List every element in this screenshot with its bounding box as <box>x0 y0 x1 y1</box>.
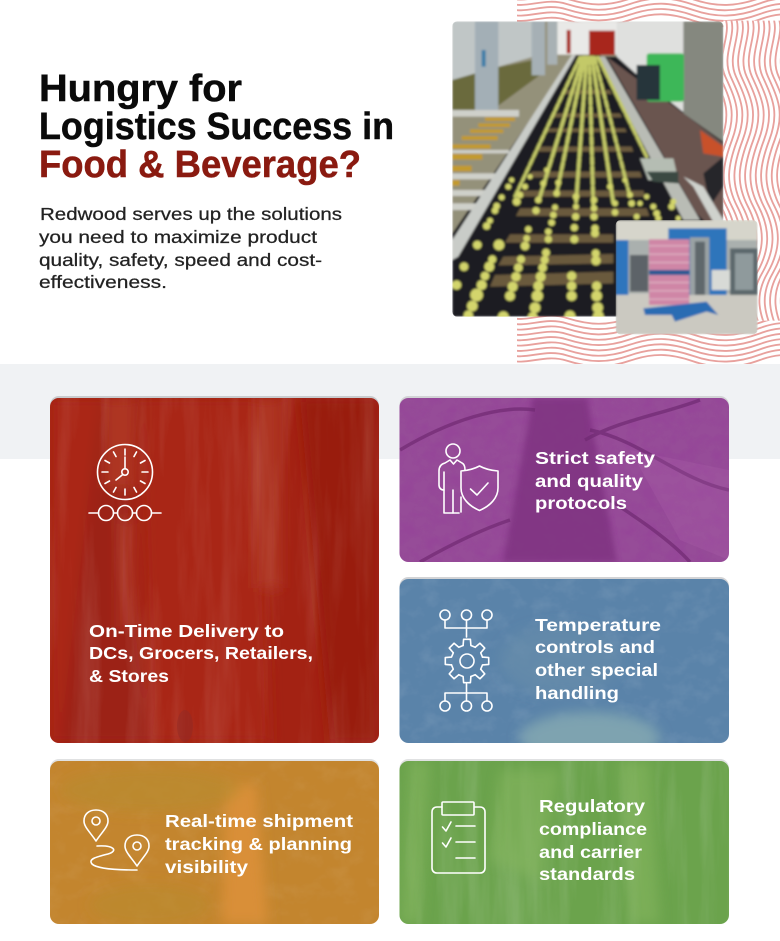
intro paragraph <box>39 204 342 292</box>
label: safety and quality <box>535 448 655 513</box>
decorative wave pattern <box>507 0 780 367</box>
label: temperature controls: handling <box>535 683 619 703</box>
label: on-time delivery: & Stores <box>89 666 169 686</box>
icon: gear network <box>440 610 492 711</box>
label: safety and quality: and quality <box>535 471 643 491</box>
label: real-time tracking: Real-time shipment <box>165 811 353 831</box>
label: temperature controls: Temperature <box>535 615 661 635</box>
icon: clock with route nodes <box>89 444 161 520</box>
title: Hungry for <box>39 68 242 110</box>
label: safety and quality: Strict safety <box>535 448 655 468</box>
label: on-time delivery: DCs, Grocers, Retailers, <box>89 643 313 663</box>
photo: fruit conveyor line <box>452 21 723 322</box>
panel: on-time delivery <box>50 396 379 743</box>
label: regulatory compliance: and carrier <box>539 842 642 862</box>
label: real-time tracking <box>165 811 353 877</box>
label: regulatory compliance: Regulatory <box>539 796 645 816</box>
label: on-time delivery <box>89 621 313 686</box>
label: regulatory compliance: compliance <box>539 819 647 839</box>
label: real-time tracking: visibility <box>165 857 248 877</box>
grey background band <box>0 364 780 459</box>
panel: real-time tracking <box>50 759 379 925</box>
label: temperature controls: other special <box>535 660 658 680</box>
intro paragraph: effectiveness. <box>39 272 167 292</box>
panel: regulatory compliance <box>400 759 729 924</box>
icon: map pins with route <box>84 810 149 870</box>
intro paragraph: quality, safety, speed and cost- <box>39 250 322 270</box>
label: on-time delivery: On-Time Delivery to <box>89 621 284 641</box>
label: regulatory compliance <box>539 796 647 884</box>
panel: temperature controls <box>400 577 729 743</box>
intro paragraph: Redwood serves up the solutions <box>40 204 342 224</box>
title: Food & Beverage? <box>39 144 361 186</box>
label: temperature controls <box>535 615 661 703</box>
photo: palletised boxes on blue machine <box>616 220 758 334</box>
label: regulatory compliance: standards <box>539 864 635 884</box>
title <box>39 68 394 186</box>
icon: checklist clipboard <box>432 802 485 873</box>
title: Logistics Success in <box>39 106 394 148</box>
label: temperature controls: controls and <box>535 637 655 657</box>
intro paragraph: you need to maximize product <box>39 227 317 247</box>
label: safety and quality: protocols <box>535 493 627 513</box>
label: real-time tracking: tracking & planning <box>165 834 352 854</box>
panel: safety and quality <box>400 396 729 562</box>
icon: person with shield <box>439 444 498 513</box>
